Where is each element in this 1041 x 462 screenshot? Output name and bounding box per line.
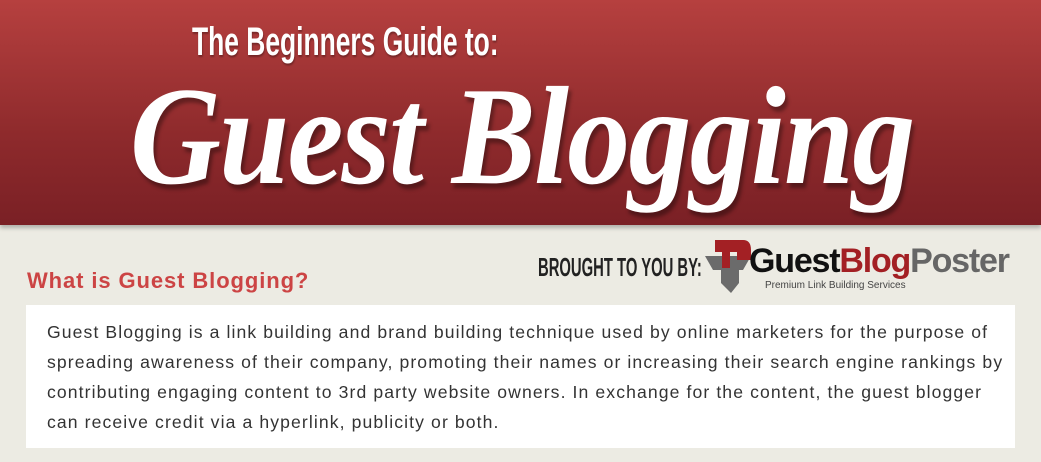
- heading: what is guest blogging: What is Guest Blogging?: [27, 268, 309, 293]
- header banner: [0, 0, 1041, 225]
- main title: Guest Blogging: [130, 59, 913, 214]
- logo: GuestBlogPoster: Premium Link Building Services: [765, 280, 906, 291]
- brought to you by: BROUGHT TO YOU BY:: [538, 252, 702, 282]
- icon: logo shield: [705, 240, 751, 293]
- text block: definition: Guest Blogging is a link building and brand building technique used by online marketers for the purpose of spreading awareness of their company, promoting their names or increasing their search engine rankings by contributing engaging content to 3rd party website owners. In exchange for the content, the guest blogger can receive credit via a hyperlink, publicity or both.: [47, 322, 1003, 432]
- logo text: GuestBlogPoster: [749, 242, 1009, 280]
- logo: GuestBlogPoster: [705, 240, 1010, 293]
- subtitle: The Beginners Guide to:: [192, 20, 499, 64]
